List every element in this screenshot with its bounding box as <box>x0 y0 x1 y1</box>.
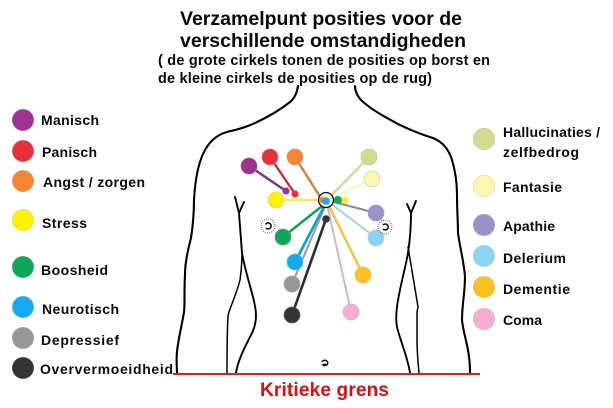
legend coma <box>473 308 542 330</box>
legend panisch <box>12 140 97 162</box>
legend: left <box>12 109 173 379</box>
legend angst: Angst / zorgen <box>43 174 145 190</box>
legend neurotisch: Neurotisch <box>42 301 119 317</box>
body outline <box>177 86 470 373</box>
central meeting point <box>318 192 334 208</box>
legend angst <box>12 170 145 192</box>
legend dementie: Dementie <box>503 281 570 297</box>
delerium position <box>368 230 384 246</box>
coma position <box>343 304 359 320</box>
title <box>180 8 466 52</box>
angst position <box>287 149 303 165</box>
oververmoeidheid position <box>284 307 300 323</box>
boosheid position <box>275 229 291 245</box>
legend apathie <box>473 214 555 236</box>
legend hallucinaties: zelfbedrog <box>503 144 579 160</box>
legend manisch: Manisch <box>41 112 99 128</box>
title: verschillende omstandigheden <box>180 30 466 52</box>
legend: right <box>473 124 600 330</box>
hallucinaties position <box>361 149 377 165</box>
left nipple <box>261 219 275 233</box>
legend dementie <box>473 276 570 298</box>
subtitle: de kleine cirkels de posities op de rug) <box>158 71 432 87</box>
fantasie position <box>364 171 380 187</box>
critical line <box>173 373 480 375</box>
legend delerium <box>473 245 566 267</box>
title: Verzamelpunt posities voor de <box>180 8 462 30</box>
legend hallucinaties: Hallucinaties / <box>503 124 600 140</box>
apathie position <box>368 205 384 221</box>
legend fantasie: Fantasie <box>503 179 562 195</box>
legend depressief: Depressief <box>41 332 119 348</box>
dementie position <box>355 267 371 283</box>
stress position <box>268 192 284 208</box>
depressief position <box>284 276 300 292</box>
navel <box>322 360 328 366</box>
legend neurotisch <box>12 296 119 318</box>
legend hallucinaties <box>473 124 600 160</box>
legend stress <box>12 209 87 231</box>
legend boosheid: Boosheid <box>41 262 108 278</box>
small back circles <box>282 187 348 223</box>
legend coma: Coma <box>503 312 542 328</box>
subtitle <box>158 53 490 87</box>
neurotisch position <box>287 254 303 270</box>
legend boosheid <box>12 256 108 278</box>
legend apathie: Apathie <box>503 218 555 234</box>
legend oververmoeidheid <box>12 357 173 379</box>
subtitle: ( de grote cirkels tonen de posities op borst en <box>158 53 490 69</box>
legend delerium: Delerium <box>503 250 566 266</box>
legend fantasie <box>473 175 562 197</box>
legend oververmoeidheid: Oververmoeidheid <box>40 361 173 377</box>
legend depressief <box>12 327 119 349</box>
critical line label: Kritieke grens <box>260 380 389 401</box>
legend panisch: Panisch <box>42 144 97 160</box>
legend manisch <box>12 109 99 131</box>
panisch position <box>262 149 278 165</box>
legend stress: Stress <box>42 215 87 231</box>
manisch position <box>241 158 257 174</box>
connector lines <box>249 157 376 315</box>
right nipple <box>378 220 392 234</box>
chest and back position circles <box>241 149 384 323</box>
